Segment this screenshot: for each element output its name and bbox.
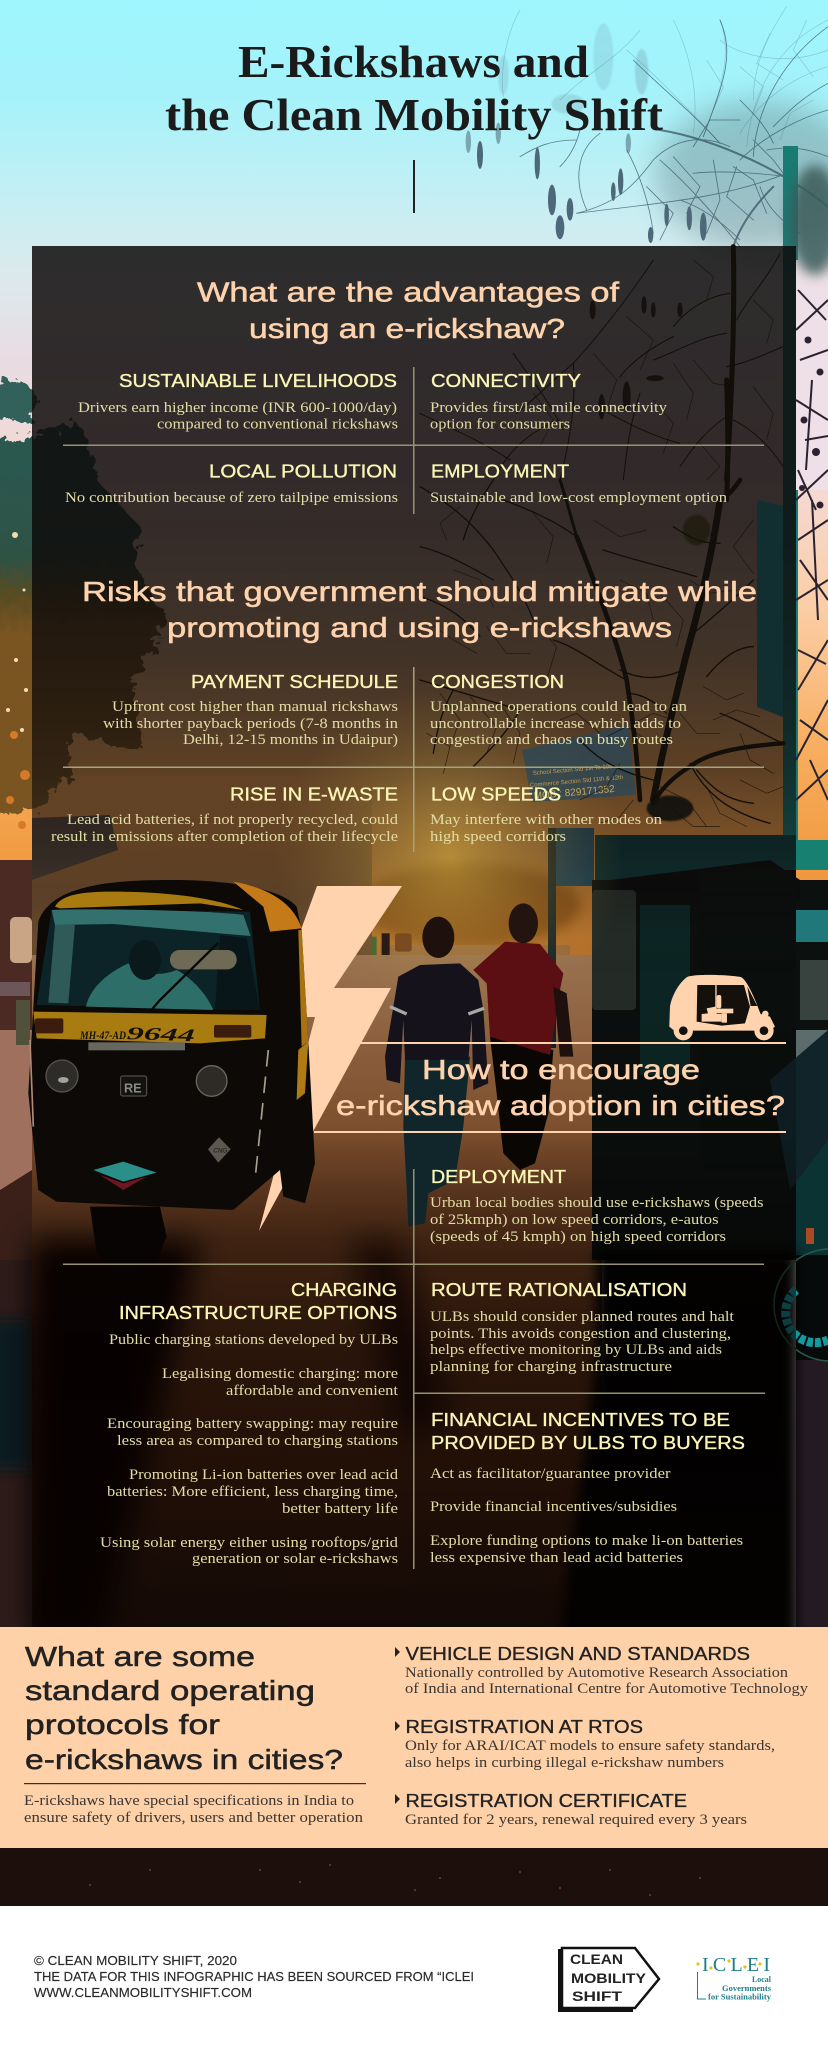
front wheel shadow (90, 1207, 167, 1270)
logo: ICLEI: ICLEI (702, 1954, 770, 1976)
heading: risks: Risks that government should mitigate while (82, 576, 757, 607)
section: how to encourage (63, 1054, 785, 1569)
item: rise in e-waste: RISE IN E-WASTE (230, 784, 398, 804)
item: financial incentives: PROVIDED BY ULBS TO BUYERS (431, 1433, 745, 1453)
logo: ICLEI (696, 1954, 772, 2002)
item: deployment: Urban local bodies should use e-rickshaws (speeds (430, 1195, 764, 1211)
logo: Clean Mobility Shift: SHIFT (572, 1988, 623, 2004)
heading: protocols: e-rickshaws in cities? (25, 1744, 343, 1775)
item: charging infrastructure options: Legalising domestic charging: more (162, 1366, 398, 1382)
item: sustainable livelihoods: SUSTAINABLE LIVELIHOODS (119, 371, 397, 391)
background photo: hanging seed pods (466, 23, 795, 243)
footer (0, 1906, 828, 2048)
man: red shirt (473, 942, 563, 1055)
heading: risks (82, 576, 757, 643)
heading: protocols (25, 1641, 343, 1775)
item: vehicle design and standards: of India and International Centre for Automotive Technology (405, 1681, 809, 1697)
text: protocols intro: E-rickshaws have special specifications in India to (24, 1793, 354, 1809)
plate text: MH-47-AD (79, 1028, 126, 1042)
man: head (422, 917, 454, 958)
dark road band (0, 1848, 828, 1906)
item: charging infrastructure options: INFRASTRUCTURE OPTIONS (119, 1303, 397, 1323)
logo: Clean Mobility Shift: CLEAN (570, 1951, 623, 1967)
item: congestion (430, 672, 688, 748)
item: route rationalisation: points. This avoids congestion and clustering, (430, 1326, 731, 1342)
heading: encourage: How to encourage (422, 1054, 700, 1085)
item: employment: EMPLOYMENT (431, 462, 569, 482)
heading: advantages (197, 276, 619, 344)
rickshaw photo: 9644 (127, 1023, 195, 1045)
heading: encourage: e-rickshaw adoption in cities? (336, 1090, 785, 1121)
item: charging infrastructure options: generation or solar e-rickshaws (192, 1551, 398, 1567)
text: protocols intro (24, 1793, 364, 1826)
item: charging infrastructure options: better battery life (282, 1501, 398, 1517)
heading: advantages: What are the advantages of (197, 276, 619, 308)
item: payment schedule: with shorter payback periods (7-8 months in (103, 716, 399, 732)
man: legs (403, 1057, 470, 1227)
road streaks (32, 1240, 450, 1640)
item: registration certificate: Granted for 2 years, renewal required every 3 years (405, 1812, 747, 1828)
item: connectivity (430, 371, 668, 432)
item: payment schedule: PAYMENT SCHEDULE (191, 672, 398, 692)
item: charging infrastructure options: less area as compared to charging stations (117, 1433, 398, 1449)
driver head (129, 940, 161, 980)
item: charging infrastructure options: affordable and convenient (226, 1383, 398, 1399)
item: registration at RTOs: also helps in curbing illegal e-rickshaw numbers (405, 1755, 724, 1771)
item: registration at RTOs: REGISTRATION AT RTOS (406, 1717, 643, 1737)
orange roof (233, 882, 302, 932)
item: low speeds (430, 784, 663, 845)
shed at left (32, 815, 118, 880)
distant people and rickshaw (372, 933, 412, 955)
item: financial incentives: FINANCIAL INCENTIVES TO BE (431, 1410, 730, 1430)
item: financial incentives: Provide financial incentives/subsidies (430, 1499, 677, 1515)
man: legs (490, 1037, 553, 1170)
item: rise in e-waste: result in emissions after completion of their lifecycle (51, 829, 398, 845)
item: rise in e-waste (51, 784, 399, 845)
corrugated fence (595, 835, 796, 895)
item: deployment: (speeds of 45 kmph) on high speed corridors (430, 1229, 726, 1245)
heading: encourage (336, 1054, 785, 1121)
item: registration certificate (395, 1791, 747, 1828)
item: congestion: uncontrollable increase which adds to (430, 716, 681, 732)
item: deployment (430, 1167, 764, 1245)
yellow roof strip (55, 892, 243, 910)
item: route rationalisation: planning for charging infrastructure (430, 1359, 672, 1375)
item: route rationalisation: ROUTE RATIONALISATION (431, 1280, 687, 1300)
item: charging infrastructure options: Promoting Li-ion batteries over lead acid (129, 1467, 399, 1483)
side yellow strip (298, 930, 308, 1047)
yellow band (33, 1012, 267, 1043)
item: employment: Sustainable and low-cost employment option (430, 490, 728, 506)
heading: protocols: protocols for (25, 1709, 220, 1740)
item: congestion: CONGESTION (431, 672, 564, 692)
item: sustainable livelihoods: compared to conventional rickshaws (157, 416, 398, 432)
section: risks (51, 576, 764, 852)
heading: advantages: using an e-rickshaw? (249, 313, 565, 344)
logo: Clean Mobility Shift (558, 1948, 659, 2012)
sleeve bands (390, 1007, 484, 1014)
item: charging infrastructure options: CHARGING (291, 1280, 397, 1300)
panel: standard operating protocols (0, 1627, 828, 1848)
school sign: Commerce Section Std 11th & 12th (530, 775, 623, 789)
man: torso and arms (385, 963, 488, 1090)
heading: protocols: standard operating (25, 1675, 315, 1706)
item: payment schedule: Upfront cost higher than manual rickshaws (112, 699, 398, 715)
item: charging infrastructure options: Encouraging battery swapping: may require (107, 1416, 398, 1432)
item: vehicle design and standards: Nationally controlled by Automotive Research Association (405, 1665, 789, 1681)
tree branches inside panel (420, 380, 783, 827)
logo: ICLEI: for Sustainability (708, 1992, 772, 2002)
item: charging infrastructure options: batteries: More efficient, less charging time, (107, 1484, 398, 1500)
man: arm (553, 987, 573, 1057)
item: deployment: of 25kmph) on low speed corridors, e-autos (430, 1212, 719, 1228)
panel sign at right (757, 500, 783, 717)
logo: Clean Mobility Shift: MOBILITY (571, 1970, 647, 1986)
item: congestion: congestion and chaos on busy routes (430, 732, 673, 748)
item: payment schedule: Delhi, 12-15 months in Udaipur) (183, 732, 398, 748)
item: charging infrastructure options (100, 1280, 399, 1567)
item: charging infrastructure options: Public charging stations developed by ULBs (109, 1332, 398, 1348)
mudguard stripes (93, 1162, 157, 1182)
windscreen right dark (215, 935, 260, 1010)
credits (34, 1954, 474, 2000)
credits: © CLEAN MOBILITY SHIFT, 2020 (34, 1954, 237, 1968)
text: protocols intro: ensure safety of drivers, users and better operation (24, 1810, 364, 1826)
indicator lights (35, 1018, 63, 1033)
title: the Clean Mobility Shift (165, 89, 664, 140)
road (32, 955, 602, 1627)
wheel at right (774, 1249, 828, 1361)
title (165, 36, 664, 140)
rear-view mirror (170, 950, 237, 969)
item: route rationalisation: helps effective monitoring by ULBs and aids (430, 1342, 722, 1358)
CNG diamond (208, 1137, 231, 1163)
shed (592, 880, 828, 1260)
item: route rationalisation: ULBs should consider planned routes and halt (430, 1309, 734, 1325)
background photo: street scene (0, 780, 828, 1640)
school sign: School Section Std 1st To 10th (533, 764, 614, 777)
rickshaw body (28, 880, 315, 1210)
title: E-Rickshaws and (238, 36, 589, 87)
windscreen (37, 910, 260, 1010)
right man in red shirt (473, 903, 573, 1170)
man: head (509, 903, 538, 943)
rickshaw photo: CNG (213, 1147, 227, 1154)
background photo: left tree foliage (0, 380, 167, 829)
item: congestion: Unplanned operations could lead to an (430, 699, 688, 715)
item: sustainable livelihoods (78, 371, 398, 432)
item: low speeds: LOW SPEEDS (431, 784, 561, 804)
dark translucent panel (32, 246, 796, 1627)
item: vehicle design and standards: VEHICLE DESIGN AND STANDARDS (406, 1644, 750, 1664)
section: advantages (63, 276, 764, 514)
background photo: sky (0, 0, 828, 1010)
item: low speeds: May interfere with other modes on (430, 812, 663, 828)
lightning bolt (259, 886, 402, 1231)
item: financial incentives: Explore funding options to make li-on batteries (430, 1533, 743, 1549)
rickshaw photo: RE (124, 1081, 142, 1095)
school sign: MOB : 829171352 (533, 784, 616, 802)
item: local pollution (65, 462, 398, 506)
item: connectivity: option for consumers (430, 416, 570, 432)
item: connectivity: CONNECTIVITY (431, 371, 581, 391)
item: payment schedule (103, 672, 399, 748)
left strip (0, 860, 32, 1030)
item: rise in e-waste: Lead acid batteries, if not properly recycled, could (67, 812, 399, 828)
lower street (0, 1260, 32, 1627)
sunset glow (270, 680, 620, 1030)
distant trees (360, 863, 580, 947)
item: registration certificate: REGISTRATION CERTIFICATE (406, 1791, 687, 1811)
credits: WWW.CLEANMOBILITYSHIFT.COM (34, 1986, 252, 2000)
icon: e-rickshaw (669, 975, 775, 1040)
item: connectivity: Provides first/last mile connectivity (430, 400, 668, 416)
heading: protocols: What are some (25, 1641, 255, 1672)
side stripes (255, 1050, 268, 1180)
headlights (46, 1060, 78, 1092)
item: low speeds: high speed corridors (430, 829, 566, 845)
backdrop behind rickshaw (32, 780, 372, 970)
background photo: teal pole and foliage at right (783, 146, 828, 846)
grille bar (88, 1042, 185, 1050)
item: registration at RTOs (395, 1717, 775, 1771)
windscreen teal strip (52, 909, 251, 936)
item: sustainable livelihoods: Drivers earn higher income (INR 600-1000/day) (78, 400, 397, 416)
blue road sign (550, 828, 594, 886)
left man walking away (385, 917, 488, 1227)
credits: THE DATA FOR THIS INFOGRAPHIC HAS BEEN SOURCED FROM “ICLEI (34, 1970, 474, 1984)
background photo: bare tree branches (502, 7, 828, 247)
school sign (522, 725, 636, 802)
driver shirt (86, 963, 213, 1010)
item: financial incentives (430, 1410, 745, 1566)
item: charging infrastructure options: Using solar energy either using rooftops/grid (100, 1535, 399, 1551)
heading: risks: promoting and using e-rickshaws (167, 612, 672, 643)
rickshaw photo (28, 880, 315, 1270)
background photo: tree canopy haze (655, 100, 828, 250)
logo: ICLEI: Governments (722, 1983, 772, 1993)
right strip: teal and grey pieces (796, 840, 828, 870)
RE badge (121, 1076, 147, 1096)
item: vehicle design and standards (395, 1644, 809, 1697)
wiper (140, 943, 218, 1023)
title divider (413, 160, 415, 213)
item: employment (430, 462, 728, 506)
item: financial incentives: Act as facilitator/guarantee provider (430, 1466, 671, 1482)
logo: ICLEI: Local (752, 1974, 772, 1984)
item: local pollution: No contribution because of zero tailpipe emissions (65, 490, 398, 506)
item: financial incentives: less expensive than lead acid batteries (430, 1550, 683, 1566)
item: deployment: DEPLOYMENT (431, 1167, 566, 1187)
item: registration at RTOs: Only for ARAI/ICAT models to ensure safety standards, (405, 1738, 775, 1754)
item: local pollution: LOCAL POLLUTION (209, 462, 397, 482)
item: route rationalisation (430, 1280, 734, 1375)
